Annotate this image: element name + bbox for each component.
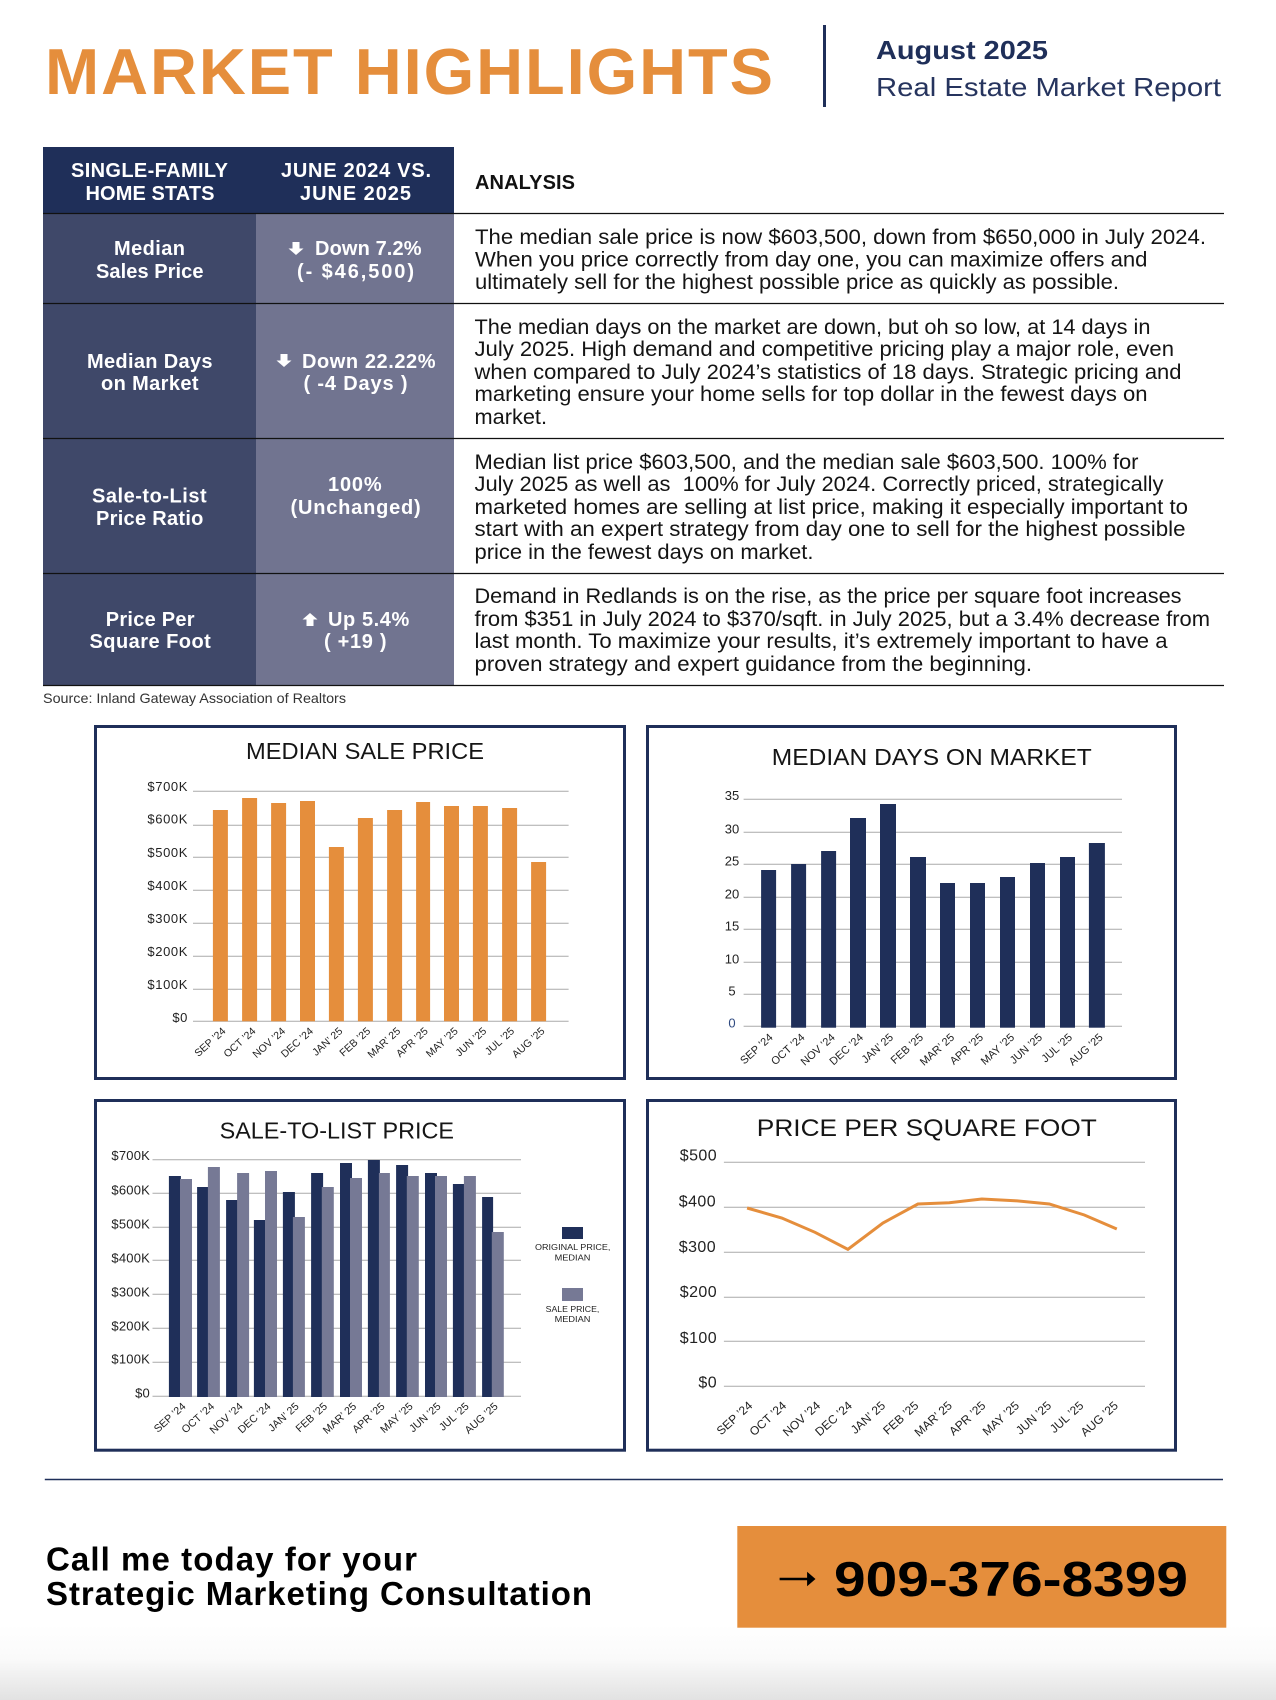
row: sale-to-list price ratio: Median list price $603,500, and the median sale $603,500. 100% for xyxy=(474,451,1138,474)
y axis labels: $100K xyxy=(111,1351,150,1366)
y axis labels: 35 xyxy=(725,788,739,803)
legend: MEDIAN xyxy=(555,1253,590,1263)
row: median sales price: (- $46,500) xyxy=(297,261,414,283)
row: price per square foot: last month. To maximize your results, it’s extremely important to have a xyxy=(474,630,1168,653)
panel: median sale price chart xyxy=(96,726,624,1078)
table header row: JUNE 2024 VS. xyxy=(281,160,431,182)
x axis labels xyxy=(152,1401,501,1437)
row: price per square foot: ( +19 ) xyxy=(324,631,386,653)
report date and subtitle: Real Estate Market Report xyxy=(876,72,1222,102)
y axis labels: $100 xyxy=(680,1330,717,1347)
call to action text: Strategic Marketing Consultation xyxy=(46,1575,592,1612)
y axis labels: 20 xyxy=(725,886,739,901)
row: median sales price: Sales Price xyxy=(96,261,204,283)
row: median days on market: Down 22.22% xyxy=(302,351,436,373)
navy bars xyxy=(761,804,1105,1028)
x axis labels: FEB ’25 xyxy=(889,1032,926,1067)
y axis labels: 0 xyxy=(728,1015,736,1030)
call to action text xyxy=(46,1541,592,1612)
x axis labels: JUL ’25 xyxy=(483,1025,517,1058)
row: median days on market: Median Days xyxy=(87,351,212,373)
row: median days on market xyxy=(87,316,1182,429)
row: sale-to-list price ratio: July 2025 as well as 100% for July 2024. Correctly priced, strategically xyxy=(474,473,1164,496)
x axis labels: DEC ’24 xyxy=(812,1398,855,1439)
x axis labels: JUL ’25 xyxy=(1039,1032,1075,1065)
table header row xyxy=(43,147,575,214)
y axis labels: $300K xyxy=(111,1284,150,1299)
x axis labels: MAY ’25 xyxy=(378,1401,416,1436)
title: MARKET HIGHLIGHTS xyxy=(45,35,773,108)
x axis labels xyxy=(714,1398,1121,1439)
x axis labels: OCT ’24 xyxy=(221,1025,259,1060)
y axis labels: $300K xyxy=(147,911,188,926)
legend: MEDIAN xyxy=(555,1314,590,1324)
y axis labels: 5 xyxy=(728,983,736,998)
x axis labels: JAN’ 25 xyxy=(848,1398,888,1437)
x axis labels: NOV ’24 xyxy=(780,1398,823,1439)
x axis labels: APR ’25 xyxy=(350,1401,387,1436)
y axis labels: $200K xyxy=(111,1318,150,1333)
x axis labels: AUG ’25 xyxy=(1078,1398,1121,1439)
y axis labels: $300 xyxy=(679,1239,716,1256)
row: median sales price: Down 7.2% xyxy=(315,238,422,260)
legend xyxy=(535,1227,610,1324)
x axis labels: OCT ’24 xyxy=(769,1032,807,1068)
x axis labels: SEP ’24 xyxy=(192,1025,229,1059)
row: sale-to-list price ratio: start with an expert strategy from day one to sell for the highest possible xyxy=(474,518,1186,541)
table header row: JUNE 2025 xyxy=(300,183,411,205)
row: median days on market: ( -4 Days ) xyxy=(304,373,408,395)
panel: stats table xyxy=(43,147,1224,686)
legend: SALE PRICE, xyxy=(546,1304,599,1314)
row: sale-to-list price ratio: Sale-to-List xyxy=(92,486,207,508)
y axis labels: 15 xyxy=(725,918,739,933)
x axis labels: JUN ’25 xyxy=(453,1025,489,1059)
x axis labels: NOV ’24 xyxy=(799,1032,838,1068)
x axis labels: MAR’ 25 xyxy=(918,1032,957,1068)
y axis labels: $500K xyxy=(111,1216,150,1231)
y axis labels: $200 xyxy=(680,1284,717,1301)
x axis labels: JUN ’25 xyxy=(1013,1398,1054,1437)
report date and subtitle xyxy=(876,35,1222,102)
row: sale-to-list price ratio: price in the fewest days on market. xyxy=(474,541,814,564)
x axis labels: MAR’ 25 xyxy=(321,1401,359,1437)
x axis labels: JUN ’25 xyxy=(1008,1032,1045,1067)
table column fills xyxy=(43,214,1224,686)
orange bars xyxy=(213,798,546,1021)
source note: Source: Inland Gateway Association of Realtors xyxy=(43,690,346,706)
row: median days on market: market. xyxy=(474,406,547,429)
y axis labels: 25 xyxy=(725,853,739,868)
x axis labels: SEP ’24 xyxy=(152,1401,188,1435)
x axis labels: JUN ’25 xyxy=(407,1401,443,1435)
y axis labels xyxy=(111,1148,150,1400)
row: median days on market: The median days on the market are down, but oh so low, at 14 days in xyxy=(474,316,1150,339)
y axis labels: $0 xyxy=(135,1385,150,1400)
x axis labels: FEB ’25 xyxy=(294,1401,330,1435)
y axis labels xyxy=(725,788,739,1030)
phone number: 909-376-8399 xyxy=(834,1553,1188,1607)
x axis labels: AUG ’25 xyxy=(1067,1032,1106,1068)
report date and subtitle: August 2025 xyxy=(876,35,1048,65)
row: price per square foot xyxy=(90,585,1210,676)
x axis labels: JUL ’25 xyxy=(1047,1398,1087,1436)
row: price per square foot: Demand in Redlands is on the rise, as the price per square foot increases xyxy=(474,585,1182,608)
row: median days on market: marketing ensure your home sells for top dollar in the fewest days on xyxy=(474,383,1148,406)
x axis labels: OCT ’24 xyxy=(180,1401,217,1436)
chart title: PRICE PER SQUARE FOOT xyxy=(757,1115,1097,1142)
row: price per square foot: from $351 in July 2024 to $370/sqft. in July 2025, but a 3.4% decrease from xyxy=(474,608,1210,631)
panel: price per square foot chart xyxy=(648,1100,1176,1450)
call to action text: Call me today for your xyxy=(46,1541,417,1578)
y axis labels: $500K xyxy=(147,845,188,860)
y axis labels: $400 xyxy=(679,1194,716,1211)
panel: median days on market chart xyxy=(648,726,1176,1078)
x axis labels: AUG ’25 xyxy=(463,1401,501,1437)
x axis labels: DEC ’24 xyxy=(827,1032,866,1068)
x axis labels: APR ’25 xyxy=(394,1025,431,1060)
row: median sales price xyxy=(96,226,1206,294)
x axis labels: JAN’ 25 xyxy=(310,1025,345,1059)
y axis labels: $600K xyxy=(111,1182,150,1197)
x axis labels: SEP ’24 xyxy=(714,1398,755,1438)
y axis labels: $0 xyxy=(698,1375,717,1392)
x axis labels xyxy=(192,1025,548,1061)
orange trend line xyxy=(747,1199,1117,1249)
x axis labels: JAN’ 25 xyxy=(860,1032,896,1066)
row: price per square foot: Price Per xyxy=(106,609,195,631)
x axis labels: MAR’ 25 xyxy=(365,1025,403,1061)
x axis labels: MAY ’25 xyxy=(980,1398,1022,1439)
gray bars: sale price xyxy=(180,1167,504,1397)
row: sale-to-list price ratio xyxy=(92,451,1188,564)
x axis labels: MAR’ 25 xyxy=(912,1398,955,1439)
table header row: SINGLE-FAMILY xyxy=(71,160,229,182)
row: median sales price: When you price correctly from day one, you can maximize offers and xyxy=(475,248,1148,272)
x axis labels: MAY ’25 xyxy=(424,1025,461,1060)
row: price per square foot: Square Foot xyxy=(90,631,211,653)
x axis labels: NOV ’24 xyxy=(250,1025,288,1061)
chart title: SALE-TO-LIST PRICE xyxy=(220,1117,454,1143)
row: median sales price: Median xyxy=(114,238,185,260)
y axis labels: $400K xyxy=(111,1250,150,1265)
row: sale-to-list price ratio: (Unchanged) xyxy=(290,497,421,519)
header divider xyxy=(823,25,826,107)
y axis labels: $500 xyxy=(680,1148,717,1165)
row: median sales price: ultimately sell for the highest possible price as quickly as possible. xyxy=(475,271,1119,294)
row: sale-to-list price ratio: 100% xyxy=(328,474,382,496)
row: median days on market: when compared to July 2024’s statistics of 18 days. Strategic pricing and xyxy=(473,361,1181,384)
legend: ORIGINAL PRICE, xyxy=(535,1242,610,1252)
row: median days on market: July 2025. High demand and competitive pricing play a major role, even xyxy=(474,338,1174,361)
y axis labels xyxy=(679,1148,717,1392)
panel: sale-to-list price chart xyxy=(96,1100,624,1450)
y axis labels: $400K xyxy=(147,878,188,893)
row: price per square foot: Up 5.4% xyxy=(328,609,410,631)
x axis labels: JAN’ 25 xyxy=(266,1401,302,1434)
table header row: HOME STATS xyxy=(86,183,214,205)
x axis labels: NOV ’24 xyxy=(208,1401,246,1437)
y axis labels: $700K xyxy=(147,779,188,794)
y axis labels: $0 xyxy=(172,1010,188,1025)
y axis labels xyxy=(147,779,188,1025)
x axis labels: AUG ’25 xyxy=(510,1025,548,1061)
x axis labels: SEP ’24 xyxy=(738,1032,776,1067)
x axis labels: APR ’25 xyxy=(946,1398,989,1438)
chart title: MEDIAN SALE PRICE xyxy=(246,738,484,764)
icon: arrow xyxy=(780,1572,816,1586)
y axis labels: $100K xyxy=(147,977,188,992)
row: price per square foot: proven strategy and expert guidance from the beginning. xyxy=(474,653,1032,676)
row: median days on market: on Market xyxy=(101,373,199,395)
chart title: MEDIAN DAYS ON MARKET xyxy=(772,744,1092,770)
row: median sales price: The median sale price is now $603,500, down from $650,000 in July 2024. xyxy=(475,226,1206,249)
x axis labels: JUL ’25 xyxy=(437,1401,472,1434)
table header row: ANALYSIS xyxy=(475,172,575,194)
y axis labels: $200K xyxy=(147,944,188,959)
x axis labels xyxy=(738,1032,1106,1068)
x axis labels: FEB ’25 xyxy=(337,1025,373,1059)
x axis labels: FEB ’25 xyxy=(880,1398,922,1437)
y axis labels: $700K xyxy=(111,1148,150,1163)
navy bars: original price xyxy=(169,1160,493,1397)
phone number button xyxy=(737,1526,1226,1628)
row: sale-to-list price ratio: marketed homes are selling at list price, making it especially important to xyxy=(474,496,1188,519)
x axis labels: MAY ’25 xyxy=(979,1032,1017,1068)
y axis labels: $600K xyxy=(147,812,188,827)
x axis labels: DEC ’24 xyxy=(236,1401,273,1436)
y axis labels: 30 xyxy=(725,821,739,836)
y axis labels: 10 xyxy=(725,951,739,966)
x axis labels: OCT ’24 xyxy=(747,1398,789,1439)
row: sale-to-list price ratio: Price Ratio xyxy=(96,508,203,530)
x axis labels: DEC ’24 xyxy=(279,1025,316,1060)
x axis labels: APR ’25 xyxy=(948,1032,986,1068)
